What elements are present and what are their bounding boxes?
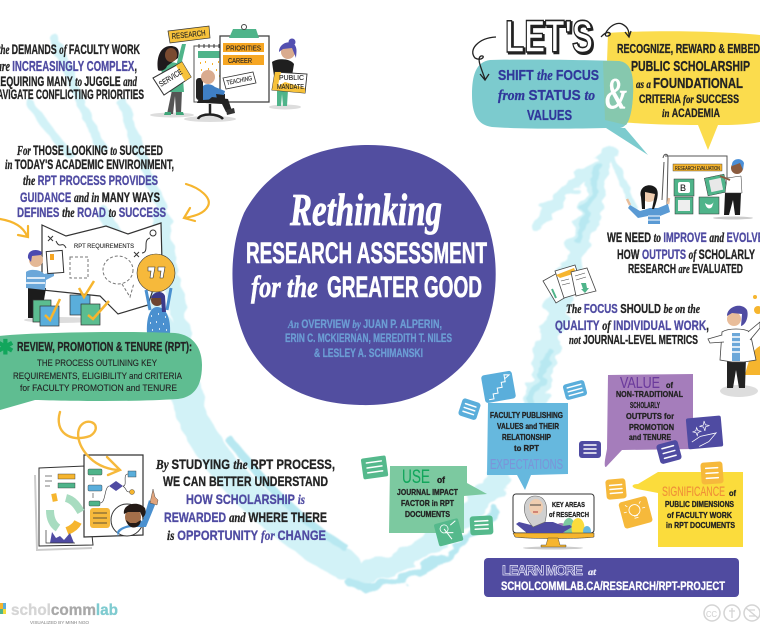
illustration: studying the RPT process [35, 455, 158, 550]
panel: review, promotion and tenure: REQUIREMENTS, ELIGIBILITY and CRITERIA [13, 371, 183, 382]
yellow bubble: recognize, reward and embed [605, 31, 760, 150]
yellow bubble text: CRITERIA for SUCCESS [639, 92, 739, 106]
text block: demands of faculty work: the DEMANDS of FACULTY WORK [0, 41, 140, 58]
icon: stacked documents [543, 265, 596, 303]
title: Rethinking [289, 185, 442, 235]
text block: RPT process provides guidance: DEFINES the ROAD to SUCCESS [17, 204, 166, 221]
icon: light bulb [618, 496, 653, 529]
person with document [26, 250, 64, 318]
panel: faculty publishing values [487, 403, 568, 490]
icon: blue note left [458, 398, 481, 421]
text block: RPT process provides guidance [5, 143, 174, 221]
panel: faculty publishing values: to RPT [514, 443, 540, 453]
icon: green note top [361, 455, 388, 480]
woman with research and service signs: RESEARCH [171, 28, 206, 41]
panel: use of journal impact factor [389, 466, 487, 533]
icon: green tap [434, 518, 464, 547]
panel: review, promotion and tenure: REVIEW, PROMOTION & TENURE (RPT): [17, 339, 192, 354]
icon: flag on stairs [481, 370, 516, 403]
panel: value of non-traditional outputs: VALUE [620, 375, 660, 392]
panel: value of non-traditional outputs: and TENURE [629, 432, 671, 442]
panel: faculty publishing values: RELATIONSHIP [502, 432, 551, 442]
yellow bubble text [617, 42, 760, 120]
title: for the [251, 269, 318, 304]
text block: RPT process provides guidance: the RPT PROCESS PROVIDES [23, 172, 158, 189]
text block: by studying the RPT process: HOW SCHOLARSHIP is [186, 491, 305, 508]
man with raised hand [111, 489, 158, 537]
authors: ERIN C. MCKIERNAN, MEREDITH T. NILES [285, 331, 452, 345]
panel: significance of public dimensions: PUBLIC DIMENSIONS [665, 499, 734, 509]
woman with research and service signs: SERVICE [157, 67, 184, 89]
panel: use of journal impact factor: USE [402, 467, 430, 488]
panel: significance of public dimensions: SIGNIFICANCE [662, 483, 725, 499]
text block: by studying the RPT process [155, 456, 335, 544]
text block: improve and evolve outputs [607, 230, 760, 276]
panel: review, promotion and tenure [0, 332, 202, 410]
icon: orange note left [605, 478, 627, 500]
logo: scholcommlab: VISUALIZED BY MINH NGO [30, 620, 90, 625]
text block: focus on quality: QUALITY of INDIVIDUAL WORK, [555, 317, 709, 334]
monitor: key areas of research: of RESEARCH [549, 510, 589, 519]
woman with public mandate sign: PUBLIC [279, 75, 304, 82]
heading: LET'S: LET'S [505, 11, 593, 62]
illustration: RPT requirements map: RPT REQUIREMENTS [74, 243, 135, 250]
panel: value of non-traditional outputs: SCHOLARLY [630, 400, 660, 410]
brush path: watercolor arrow [30, 38, 632, 585]
icon: purple note left [579, 441, 601, 458]
panel: faculty publishing values: VALUES and THEIR [497, 421, 559, 431]
authors: An OVERVIEW by JUAN P. ALPERIN, [287, 317, 442, 331]
donut chart [50, 497, 81, 531]
teal bubble text: from STATUS to [498, 87, 595, 104]
arrow: yellow curl right [184, 184, 209, 221]
icon: blue note right [562, 379, 588, 401]
arrow: yellow curl left [0, 219, 28, 237]
license icons [704, 605, 760, 621]
panel: review, promotion and tenure: THE PROCESS OUTLINING KEY [37, 358, 158, 369]
arrow: curl from LET'S to teal bubble [473, 37, 496, 80]
panel: significance of public dimensions: in RPT DOCUMENTS [666, 520, 735, 530]
panel: value of non-traditional outputs: OUTPUTS for [626, 411, 675, 421]
clipboard with priorities [220, 24, 269, 102]
title: GREATER GOOD [327, 271, 482, 304]
panel: significance of public dimensions: of [729, 488, 736, 498]
person at the board [720, 159, 744, 215]
panel: value of non-traditional outputs: PROMOTION [629, 422, 674, 432]
authors: & LESLEY A. SCHIMANSKI [314, 346, 423, 360]
panel: faculty publishing values: FACULTY PUBLISHING [490, 410, 563, 420]
icon: green note bottom [470, 515, 494, 536]
teal bubble text: VALUES [527, 107, 572, 124]
teal bubble: shift the focus [472, 60, 648, 155]
heading: LET'S: LET'S [506, 12, 594, 64]
presenter [516, 496, 572, 533]
illustration: scientist [708, 295, 760, 397]
panel: significance of public dimensions [633, 472, 743, 547]
heading: LET'S [473, 11, 631, 80]
panel: faculty publishing values: EXPECTATIONS [490, 456, 563, 473]
logo: scholcommlab: scholcommlab [11, 602, 118, 619]
man in office chair: TEACHING [226, 75, 253, 87]
text block: by studying the RPT process: By STUDYING the RPT PROCESS, [155, 456, 335, 473]
logo: scholcommlab [0, 602, 118, 625]
monitor: key areas of research: KEY AREAS [552, 500, 585, 509]
woman with public mandate sign [272, 38, 307, 106]
woman with raised hands [627, 185, 670, 224]
text block: by studying the RPT process: is OPPORTUNITY for CHANGE [167, 527, 326, 544]
text block: RPT process provides guidance: For THOSE LOOKING to SUCCEED [16, 143, 163, 158]
man in office chair [196, 70, 256, 119]
text block: by studying the RPT process: REWARDED and WHERE THERE [164, 509, 327, 526]
arrow: curl from LET'S to yellow bubble [601, 23, 631, 37]
panel: use of journal impact factor: FACTOR in RPT [401, 498, 455, 508]
teal bubble text: SHIFT the FOCUS [498, 67, 599, 84]
woman holding quote bubble [137, 254, 175, 334]
panel: learn more: LEARN MORE [502, 562, 583, 578]
illustration: juggling priorities [150, 24, 307, 122]
ampersand: & [605, 69, 627, 118]
clipboard with priorities: PRIORITIES [226, 44, 261, 52]
woman with public mandate sign: MANDATE [277, 84, 304, 91]
illustration: research evaluation board: B [680, 183, 686, 193]
panel: significance of public dimensions: of FACULTY WORK [667, 510, 733, 520]
panel: value of non-traditional outputs: of [666, 380, 673, 390]
text block: RPT process provides guidance: GUIDANCE and in MANY WAYS [20, 189, 160, 206]
text block: by studying the RPT process: WE CAN BETTER UNDERSTAND [163, 473, 328, 489]
license icons: CC [706, 610, 717, 619]
panel: use of journal impact factor: of [437, 475, 446, 485]
woman with research and service signs [153, 26, 210, 115]
panel: learn more [484, 558, 739, 597]
text block: demands of faculty work: are INCREASINGLY COMPLEX, [0, 59, 137, 75]
title circle [232, 145, 496, 405]
flowchart [88, 469, 136, 528]
title: RESEARCH ASSESSMENT [246, 237, 487, 270]
icon: hand and sparkles [686, 415, 723, 449]
text block: demands of faculty work [0, 41, 144, 102]
illustration: research evaluation board [627, 154, 753, 224]
calendar [194, 44, 226, 102]
icon: purple note right [656, 439, 682, 465]
monitor: key areas of research [513, 494, 594, 550]
yellow bubble text: in ACADEMIA [662, 106, 720, 120]
text block: RPT process provides guidance: in TODAY'S ACADEMIC ENVIRONMENT, [5, 157, 174, 172]
overlap of bubbles [603, 61, 633, 125]
illustration: research evaluation board: RESEARCH EVALUATION [675, 166, 720, 172]
text block: focus on quality: not JOURNAL-LEVEL METRICS [569, 332, 698, 347]
clipboard with priorities: CAREER [228, 56, 252, 65]
teal bubble text [498, 67, 599, 124]
panel: review, promotion and tenure: for FACULTY PROMOTION and TENURE [20, 383, 177, 394]
title [246, 185, 487, 304]
panel: use of journal impact factor: JOURNAL IMPACT [397, 487, 459, 497]
illustration: RPT requirements map [24, 223, 175, 334]
panel: learn more: at [588, 567, 597, 577]
panel: use of journal impact factor: DOCUMENTS [405, 509, 450, 519]
panel: value of non-traditional outputs: NON-TRADITIONAL [616, 389, 683, 399]
panel: value of non-traditional outputs [605, 374, 693, 467]
authors [285, 317, 452, 360]
arrow: yellow loop [59, 412, 120, 475]
checked boxes [33, 281, 109, 326]
text block: focus on quality [555, 301, 709, 347]
icon: orange note right [700, 461, 724, 485]
text block: focus on quality: The FOCUS SHOULD be on the [566, 301, 700, 316]
